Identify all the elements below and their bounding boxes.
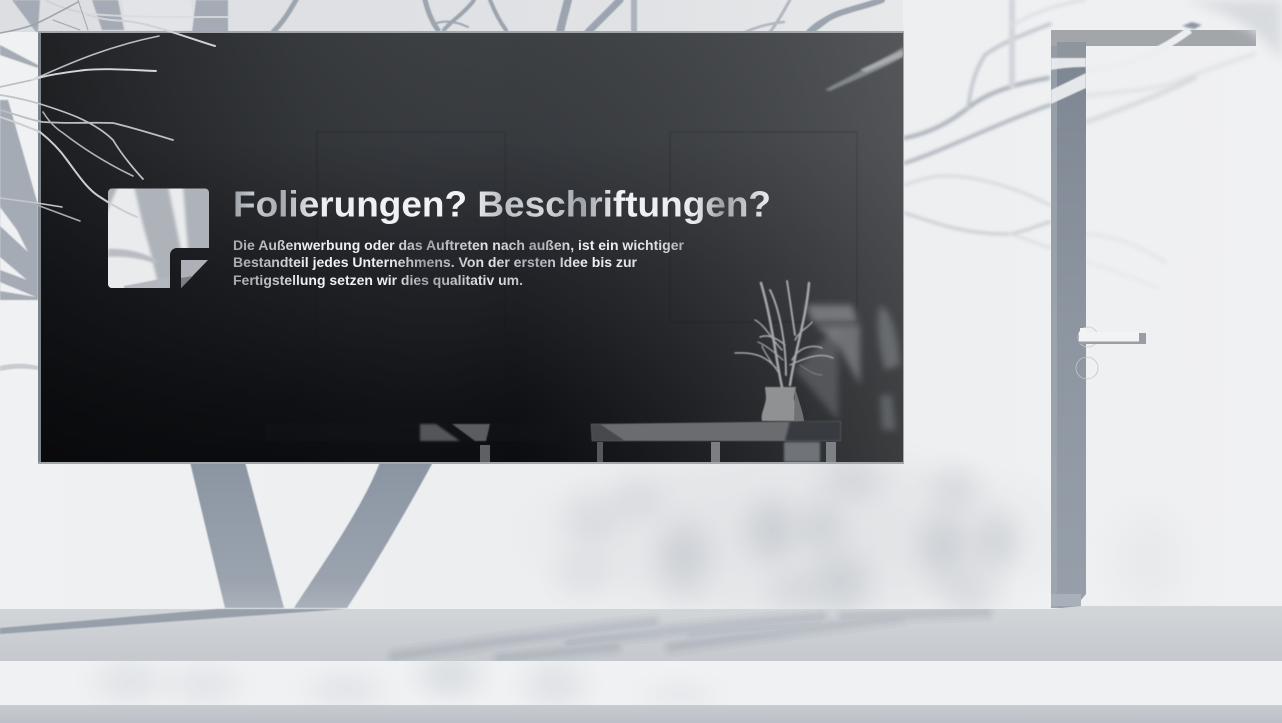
reflected branch top right — [825, 47, 903, 91]
trunk floor shadow — [0, 609, 345, 634]
tree trunk shadow — [190, 462, 433, 608]
bottom step — [0, 705, 1282, 723]
foreground branches top left — [0, 0, 230, 221]
wall light reflections — [795, 305, 900, 430]
door — [1051, 22, 1256, 609]
plant and vase — [735, 281, 833, 421]
paragraph: Bestandteil jedes Unternehmens. Von der ersten Idee bis zur — [233, 255, 638, 270]
logo icon — [104, 186, 209, 292]
heading: Folierungen? Beschriftungen? — [233, 184, 771, 224]
billboard — [38, 31, 904, 464]
paragraph: Die Außenwerbung oder das Auftreten nach außen, ist ein wichtiger — [233, 238, 685, 253]
background room panels — [418, 47, 903, 462]
paragraph — [233, 238, 685, 288]
lower step face — [108, 661, 568, 696]
paragraph: Fertigstellung setzen wir dies qualitativ um. — [233, 273, 523, 288]
door frame — [1051, 22, 1256, 609]
upper step — [0, 606, 1282, 661]
branch blur top right — [1180, 0, 1282, 62]
floor steps — [0, 606, 1282, 723]
door handle — [1076, 327, 1146, 379]
mottled foliage shadows — [562, 464, 1028, 609]
table — [418, 420, 842, 462]
